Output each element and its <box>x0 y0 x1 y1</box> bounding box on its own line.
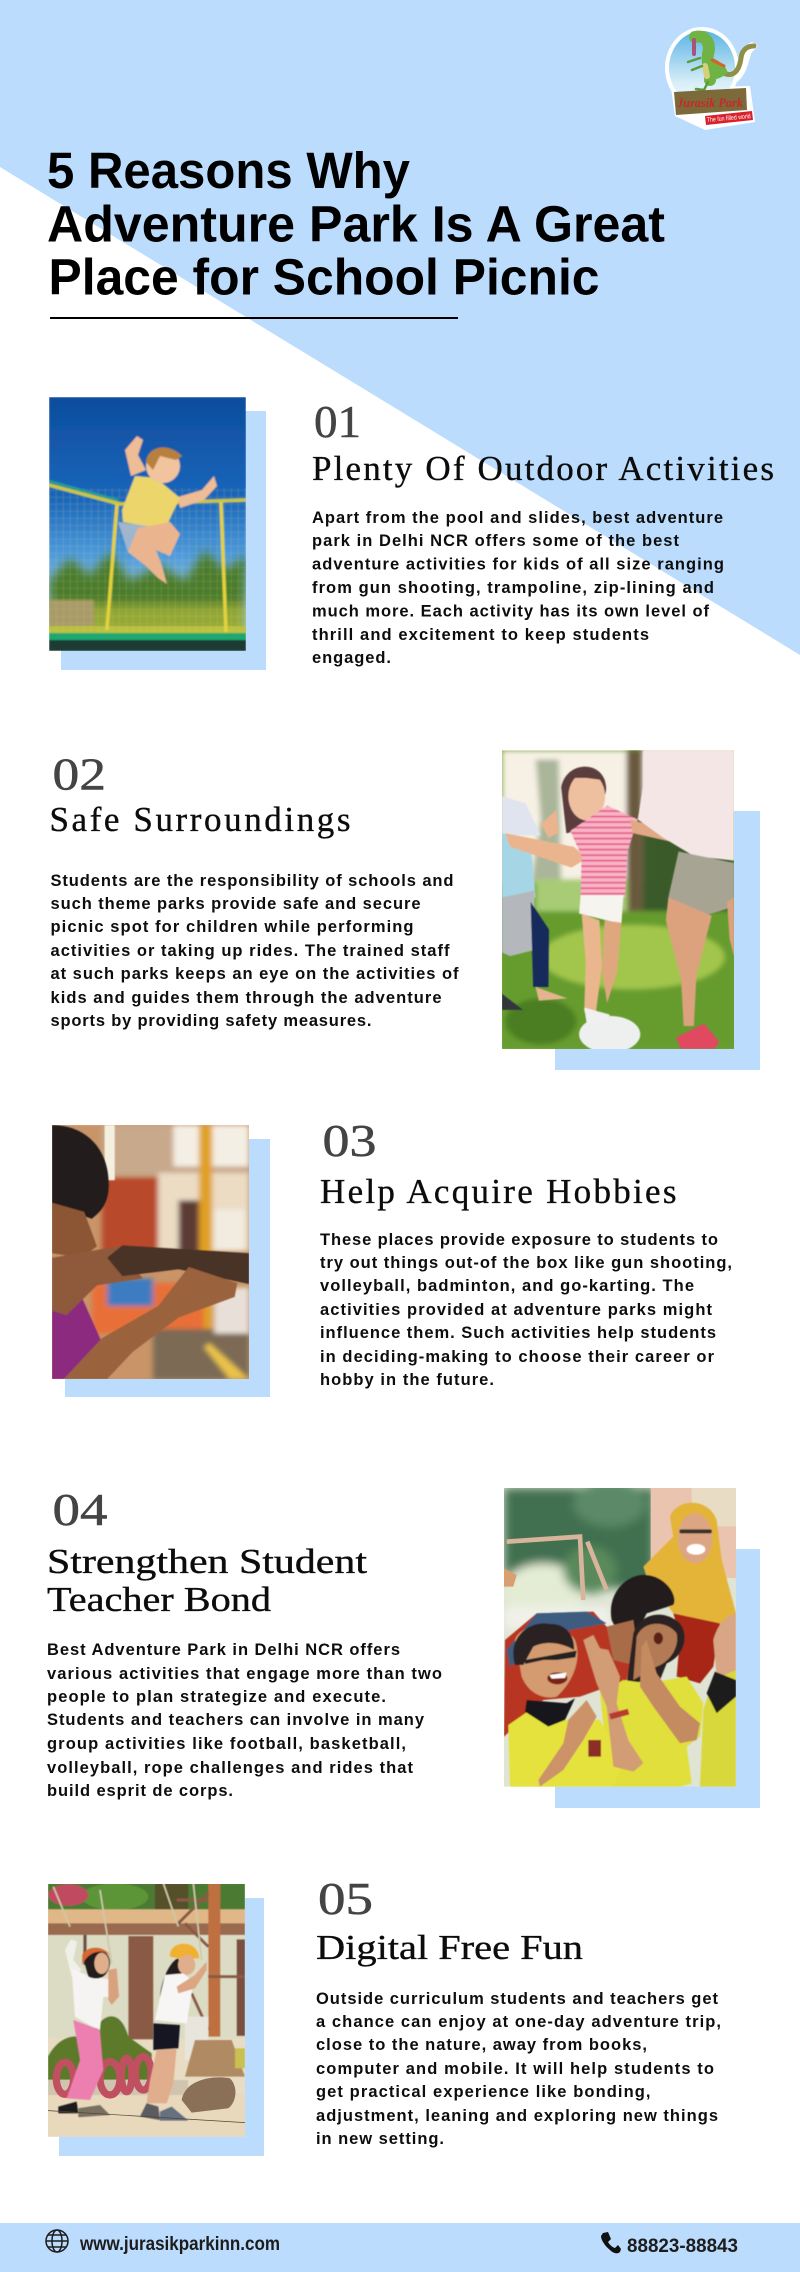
body text 04: volleyball, rope challenges and rides that <box>47 1759 414 1777</box>
panel: reason 04 <box>47 1480 760 1808</box>
heading 04 <box>47 1542 367 1619</box>
body text 02: picnic spot for children while performing <box>50 918 414 936</box>
number 04: 04 <box>52 1484 108 1535</box>
body text 03: activities provided at adventure parks might <box>320 1301 712 1319</box>
body text 05 <box>316 1990 721 2148</box>
body text 04: Best Adventure Park in Delhi NCR offers <box>47 1641 400 1659</box>
red tag: The fun filled world <box>707 113 751 124</box>
number 02: 02 <box>52 748 106 800</box>
body text 05: in new setting. <box>316 2130 444 2148</box>
body text 01: from gun shooting, trampoline, zip-lining and <box>312 579 714 597</box>
panel: reason 05 <box>48 1873 721 2156</box>
body text 03: in deciding-making to choose their career or <box>320 1348 715 1366</box>
body text 01: engaged. <box>312 649 391 667</box>
body text 02: kids and guides them through the adventure <box>50 989 442 1007</box>
title: Place for School Picnic <box>48 248 600 306</box>
panel: reason 03 <box>52 1115 732 1397</box>
title <box>47 142 665 306</box>
body text 05: get practical experience like bonding, <box>316 2083 650 2101</box>
body text 05: close to the nature, away from books, <box>316 2036 647 2054</box>
body text 03: volleyball, badminton, and go-karting. The <box>320 1277 694 1295</box>
logo: Jurassic Park badge <box>665 27 758 130</box>
panel: reason 02 <box>50 748 760 1070</box>
body text 01: adventure activities for kids of all size ranging <box>312 556 724 574</box>
body text 01: much more. Each activity has its own level of <box>312 602 710 620</box>
panel: reason 01 <box>49 396 774 670</box>
dinosaur <box>688 36 754 90</box>
number 03: 03 <box>322 1115 376 1166</box>
photo backing 04 <box>555 1549 760 1808</box>
body text 01 <box>312 509 724 667</box>
photo backing 03 <box>65 1139 270 1397</box>
logo: Jurassic Park badge: Jurasik Park <box>676 95 743 110</box>
body text 05: Outside curriculum students and teachers get <box>316 1990 718 2008</box>
photo backing 02 <box>555 811 760 1070</box>
body text 02: at such parks keeps an eye on the activities of <box>50 965 459 983</box>
body text 05: computer and mobile. It will help students to <box>316 2060 714 2078</box>
body text 02: such theme parks provide safe and secure <box>50 895 420 913</box>
body text 03: These places provide exposure to students to <box>320 1231 718 1249</box>
body text 04 <box>47 1641 442 1800</box>
body text 02 <box>50 872 459 1030</box>
body text 01: Apart from the pool and slides, best adventure <box>312 509 723 527</box>
number 01: 01 <box>314 396 361 447</box>
body text 02: sports by providing safety measures. <box>50 1012 372 1030</box>
photo: girl with soccer ball in park <box>502 751 734 1053</box>
body text 05: adjustment, leaning and exploring new things <box>316 2107 718 2125</box>
body text 03: try out things out-of the box like gun shooting, <box>320 1254 732 1272</box>
website: www.jurasikparkinn.com <box>79 2234 280 2255</box>
ground banner <box>674 88 747 115</box>
body text 02: activities or taking up rides. The trained staff <box>50 942 450 960</box>
photo: child on trampoline <box>49 397 246 651</box>
heading 05: Digital Free Fun <box>316 1928 583 1967</box>
photo backing 01 <box>61 411 266 670</box>
photo backing 05 <box>59 1898 264 2156</box>
photo: students laughing with teacher <box>503 1480 736 1787</box>
heading 01: Plenty Of Outdoor Activities <box>312 449 774 488</box>
heading 04: Teacher Bond <box>47 1580 272 1619</box>
title underline <box>50 317 458 319</box>
heading 03: Help Acquire Hobbies <box>320 1172 676 1211</box>
footer band <box>0 2223 800 2272</box>
body text 04: various activities that engage more than two <box>47 1665 442 1683</box>
heading 02: Safe Surroundings <box>50 800 350 839</box>
body text 04: build esprit de corps. <box>47 1782 233 1800</box>
number 05: 05 <box>318 1873 373 1924</box>
body text 01: park in Delhi NCR offers some of the best <box>312 532 680 550</box>
body text 01: thrill and excitement to keep students <box>312 626 649 644</box>
title: Adventure Park Is A Great <box>47 196 665 252</box>
icon: phone <box>601 2232 621 2253</box>
heading 04: Strengthen Student <box>47 1542 367 1581</box>
body text 04: people to plan strategize and execute. <box>47 1688 386 1706</box>
body text 05: a chance can enjoy at one-day adventure trip, <box>316 2013 721 2031</box>
body text 03: hobby in the future. <box>320 1371 494 1389</box>
body text 04: group activities like football, basketball, <box>47 1735 406 1753</box>
body text 03 <box>320 1231 732 1389</box>
phone number: 88823-88843 <box>627 2236 738 2257</box>
photo: boy aiming at shooting gallery <box>52 1125 249 1379</box>
title: 5 Reasons Why <box>47 142 411 199</box>
body text 03: influence them. Such activities help students <box>320 1324 716 1342</box>
body text 04: Students and teachers can involve in many <box>47 1711 425 1729</box>
body text 02: Students are the responsibility of schools and <box>50 872 454 890</box>
icon: globe <box>46 2230 68 2252</box>
photo: two girls on rope course <box>48 1883 245 2137</box>
